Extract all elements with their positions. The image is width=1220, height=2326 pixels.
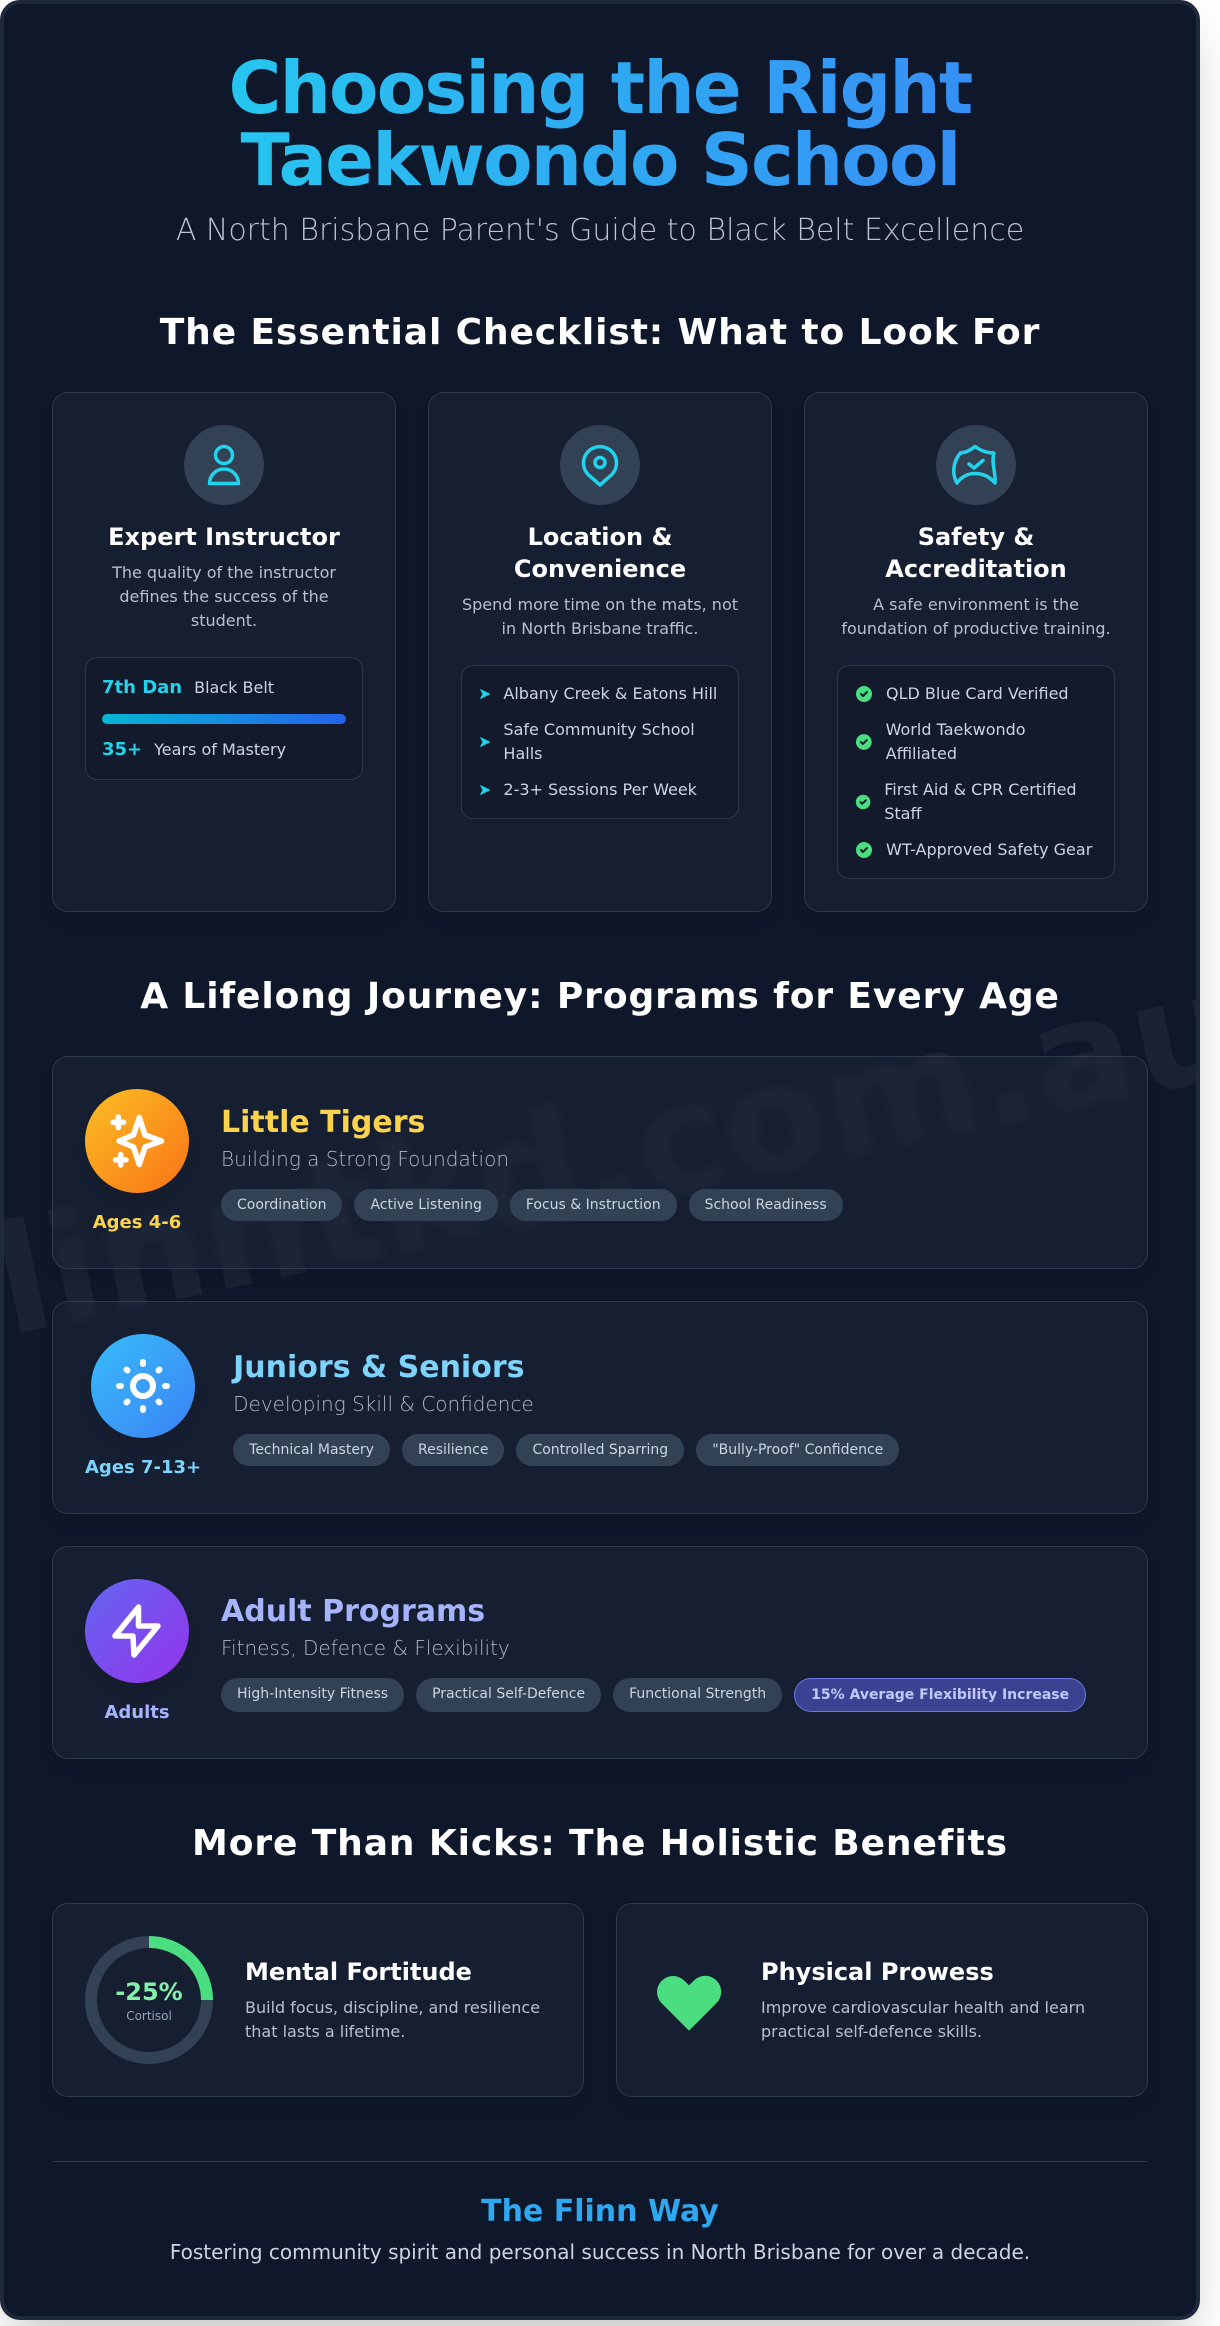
skill tags (221, 1678, 1086, 1712)
age label: Ages 7-13+ (85, 1457, 201, 1478)
skill tags (233, 1434, 899, 1466)
instructor stats (85, 657, 363, 780)
stat: years: Years of Mastery (154, 740, 286, 759)
location list: Safe Community School Halls (503, 720, 695, 763)
donut label (115, 1978, 183, 2023)
panel: physical prowess (616, 1903, 1148, 2097)
icon: lightning bolt (85, 1579, 189, 1683)
skill tags: Controlled Sparring (532, 1442, 668, 1458)
stat: rank: Black Belt (194, 678, 274, 697)
card description: The quality of the instructor defines the success of the student. (112, 563, 336, 630)
panel: juniors and seniors (52, 1301, 1148, 1514)
panel: location and convenience (428, 392, 772, 912)
icon: map pin (560, 425, 640, 505)
skill tags: Practical Self-Defence (432, 1686, 585, 1702)
accreditation list: World Taekwondo Affiliated (886, 720, 1026, 763)
accreditation list: WT-Approved Safety Gear (886, 840, 1092, 859)
benefit text (245, 1958, 540, 2041)
card heading: Expert Instructor (108, 523, 340, 551)
location list: 2-3+ Sessions Per Week (503, 780, 697, 799)
footer text: Fostering community spirit and personal success in North Brisbane for over a decade. (170, 2240, 1030, 2264)
skill tags: High-Intensity Fitness (237, 1686, 388, 1702)
age label: Ages 4-6 (93, 1212, 181, 1233)
skill tags: Technical Mastery (249, 1442, 374, 1458)
location list (461, 665, 739, 819)
skill tags: "Bully-Proof" Confidence (712, 1442, 883, 1458)
location list: ➤ (478, 732, 491, 751)
program name: Juniors & Seniors (233, 1350, 524, 1385)
donut label: Cortisol (126, 2009, 172, 2023)
skill tags: School Readiness (705, 1197, 827, 1213)
card heading: Location & Convenience (514, 523, 686, 583)
donut label: -25% (115, 1978, 183, 2006)
title: Taekwondo School (240, 118, 960, 202)
icon: heart (657, 1976, 722, 2030)
program tagline: Developing Skill & Confidence (233, 1392, 534, 1416)
stat: years: 35+ (102, 739, 142, 760)
age badge: ages 7-13+ (85, 1334, 201, 1478)
skill tags: Resilience (418, 1442, 488, 1458)
program tagline: Building a Strong Foundation (221, 1147, 509, 1171)
footer heading: The Flinn Way (481, 2194, 719, 2229)
card description: A safe environment is the foundation of productive training. (841, 595, 1111, 638)
icon: shield (936, 425, 1016, 505)
panel: little tigers (52, 1056, 1148, 1269)
heading: programs: A Lifelong Journey: Programs for Every Age (140, 976, 1060, 1017)
title (52, 52, 1148, 196)
subtitle: A North Brisbane Parent's Guide to Black Belt Excellence (176, 213, 1024, 248)
panel: adult programs (52, 1546, 1148, 1759)
title: Choosing the Right (229, 46, 971, 130)
icon: person (184, 425, 264, 505)
skill tags: 15% Average Flexibility Increase (811, 1687, 1069, 1703)
program tagline: Fitness, Defence & Flexibility (221, 1636, 510, 1660)
accreditation list (837, 665, 1115, 879)
location list: ➤ (478, 684, 491, 703)
skill tags: Focus & Instruction (526, 1197, 661, 1213)
location list: Albany Creek & Eatons Hill (503, 684, 717, 703)
stat: rank: 7th Dan (102, 677, 182, 698)
skill tags (221, 1189, 843, 1221)
program name: Adult Programs (221, 1594, 485, 1629)
heading: benefits: More Than Kicks: The Holistic Benefits (192, 1823, 1008, 1864)
accreditation list: QLD Blue Card Verified (886, 684, 1069, 703)
donut chart: cortisol (85, 1936, 213, 2064)
skill tags: Functional Strength (629, 1686, 766, 1702)
age label: Adults (104, 1702, 170, 1723)
skill tags: Coordination (237, 1197, 326, 1213)
benefit description: Build focus, discipline, and resilience that lasts a lifetime. (245, 1998, 540, 2041)
stat: years (102, 739, 286, 760)
accreditation list: First Aid & CPR Certified Staff (884, 780, 1077, 823)
footer (52, 2161, 1148, 2266)
panel: safety and accreditation (804, 392, 1148, 912)
benefit heading: Mental Fortitude (245, 1958, 472, 1986)
panel: mental fortitude (52, 1903, 584, 2097)
stat: rank (102, 677, 274, 698)
program details (221, 1594, 1086, 1712)
card description: Spend more time on the mats, not in North Brisbane traffic. (462, 595, 738, 638)
checklist cards (52, 392, 1148, 912)
header (176, 46, 1024, 248)
program name: Little Tigers (221, 1105, 425, 1140)
section: essential checklist (52, 312, 1148, 912)
heading: checklist: The Essential Checklist: What to Look For (160, 312, 1040, 353)
program details (221, 1105, 843, 1221)
section: programs (52, 976, 1148, 1759)
benefit heading: Physical Prowess (761, 1958, 994, 1986)
age badge: adults (85, 1579, 189, 1723)
skill tags: Active Listening (370, 1197, 482, 1213)
icon: sparkles (85, 1089, 189, 1193)
icon: sun (91, 1334, 195, 1438)
benefit description: Improve cardiovascular health and learn practical self-defence skills. (761, 1998, 1085, 2041)
progress bar (102, 714, 346, 724)
location list: ➤ (478, 780, 491, 799)
card heading: Safety & Accreditation (885, 523, 1067, 583)
benefit cards (52, 1903, 1148, 2097)
age badge: ages 4-6 (85, 1089, 189, 1233)
program details (231, 1350, 899, 1466)
panel: expert instructor (52, 392, 396, 912)
section: benefits (52, 1823, 1148, 2097)
benefit text (761, 1958, 1085, 2041)
